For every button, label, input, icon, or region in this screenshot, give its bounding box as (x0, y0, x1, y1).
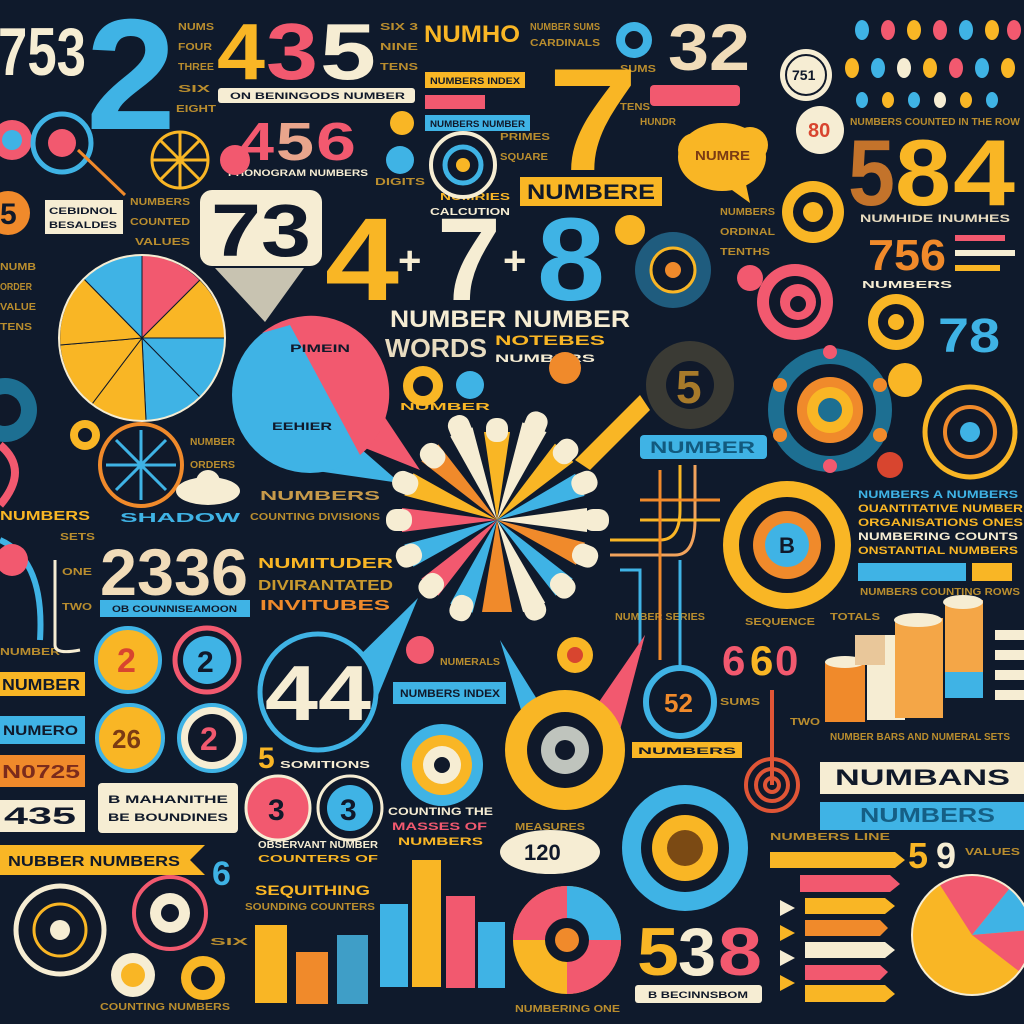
caption cream mid left (98, 783, 238, 833)
badge ornament (782, 181, 844, 243)
icon grid (845, 20, 1021, 108)
badge 80 (796, 106, 844, 154)
dense small text texture: TWO (62, 602, 92, 613)
text block right (858, 489, 1023, 557)
caption bar chart: SEQUITHING (255, 882, 370, 898)
funnel dial middle (500, 635, 645, 810)
sum 4+7+8: 7 (437, 194, 501, 326)
left stacked labels: N0725 (2, 762, 80, 782)
dense small text texture: NUMBER SERIES (615, 612, 705, 623)
caption left lines: SHADOW (120, 510, 241, 525)
caption lines low: COUNTING THE (388, 806, 493, 818)
label NUMBERE: NUMBERE (527, 181, 655, 204)
numeral 7: 7 (548, 38, 638, 201)
caption left cream (45, 200, 123, 234)
small captions: COUNTERS OF (258, 854, 378, 865)
dense small text texture: CARDINALS (530, 38, 600, 49)
dense small text texture: DIGITS (375, 177, 425, 188)
numeral 456: 6 (316, 112, 356, 172)
caption 538 (635, 985, 762, 1003)
left column ornaments (0, 120, 32, 160)
bar 2336: OB COUNNISEAMOON (112, 604, 237, 614)
left-edge figure (0, 540, 80, 652)
numeral 660: 6 (722, 637, 745, 684)
small captions: NUMRIES (440, 192, 510, 203)
text block right: ORGANISATIONS ONES (858, 517, 1023, 529)
numeral 538 (637, 914, 762, 990)
dense small text texture: SOUNDING COUNTERS (245, 902, 375, 913)
block of small labels: NUMBERS INDEX (430, 76, 520, 86)
dense small text texture: ORDINAL (720, 227, 775, 238)
numeral 584: 4 (953, 120, 1015, 225)
small captions: SOMITIONS (280, 760, 371, 771)
label NUMBANS (820, 762, 1024, 794)
dense small text texture: ORDER (0, 282, 33, 293)
bubble 120: 120 (524, 840, 561, 865)
small yellow ornament (70, 420, 100, 450)
small captions (258, 192, 510, 865)
block of small labels: NUMBERS NUMBER (430, 119, 526, 129)
eye dial bottom (134, 877, 206, 949)
label NUMBERE (520, 177, 662, 206)
large blue dial (622, 785, 748, 911)
dense small text texture: NUMBERS (130, 197, 190, 208)
caption lines low: NUMBERS (398, 836, 483, 848)
circle 44 (260, 598, 418, 750)
text block mid: DIVIRANTATED (258, 577, 393, 594)
numeral 5 small: 5 (258, 742, 275, 775)
dense small text texture: NUMBER (190, 437, 236, 448)
sum 4+7+8: 8 (537, 194, 605, 326)
left edge dial (0, 378, 37, 442)
arrow banner (0, 845, 205, 875)
caption left lines: NUMBERS (0, 508, 90, 523)
dense small text texture: NUMBERING ONE (515, 1004, 620, 1015)
label NUMBERS blue (820, 802, 1024, 830)
block of small labels (425, 72, 530, 131)
box 73 (200, 189, 322, 272)
spiral (757, 264, 833, 340)
numeral 59 (908, 835, 956, 876)
dense small text texture: NUMBER SUMS (530, 22, 600, 33)
caption cream mid left: B MAHANITHE (108, 794, 228, 806)
numeral 59: 5 (908, 835, 928, 876)
dense small text texture: NUMBERS COUNTED IN THE ROW (850, 117, 1021, 128)
dense small text texture: SUMS (620, 64, 656, 75)
dense small text texture: COUNTING DIVISIONS (250, 512, 380, 523)
numeral 2336: 2336 (100, 535, 248, 609)
ornament dark blue dial (635, 232, 711, 308)
left stacked labels: 435 (4, 803, 76, 830)
caption bar (218, 88, 415, 103)
compass (100, 424, 182, 506)
eye dial (33, 114, 125, 195)
callout pie: PIMEIN (290, 343, 350, 355)
dense small text texture: SEQUENCE (745, 617, 815, 628)
dense small text texture: NUMBERS LINE (770, 832, 891, 843)
left stacked labels (0, 672, 85, 832)
dense small text texture: SIX 3 (380, 22, 419, 33)
pie chart bottom right (912, 875, 1024, 995)
label NUMBER (640, 435, 767, 459)
dense small text texture: SETS (60, 532, 95, 543)
sum 4+7+8 (325, 194, 605, 326)
speech cloud: NUMRE (695, 148, 750, 163)
dense small text texture: ONE (62, 567, 92, 578)
sun dial B (723, 481, 851, 609)
numeral 59: 9 (936, 835, 956, 876)
dial centre low (401, 724, 483, 806)
small captions: OBSERVANT NUMBER (258, 840, 379, 851)
numeral 584 (848, 120, 1015, 225)
small notes: NUMBERS (495, 353, 595, 365)
heading NUMHO: NUMHO (424, 21, 520, 48)
bar text right (858, 563, 1012, 581)
label blue upper (393, 682, 506, 704)
sum 4+7+8: 4 (325, 194, 399, 326)
small list far right (995, 630, 1024, 700)
text block mid: INVITUBES (260, 597, 390, 614)
dense small text texture: VALUES (965, 847, 1020, 858)
caption numbers: NUMHIDE INUMHES (860, 213, 1010, 225)
dense small text texture: NINE (380, 42, 419, 53)
text block mid: NUMITUDER (258, 555, 393, 572)
label blue upper: NUMBERS INDEX (400, 688, 501, 700)
dense small text texture: TENS (620, 102, 650, 113)
small dials bottom (111, 953, 225, 1000)
sun dial B: B (779, 533, 795, 558)
caption bar: ON BENINGODS NUMBER (230, 91, 406, 101)
caption left lines (0, 488, 381, 525)
pink label bar (650, 85, 740, 106)
numeral 753: 753 (0, 14, 86, 90)
sunburst ornament (152, 132, 208, 188)
dense small text texture: NUMBER BARS AND NUMERAL SETS (830, 732, 1010, 743)
dense small text texture: TENS (380, 62, 418, 73)
caption left cream: BESALDES (49, 220, 117, 230)
numeral 5 tile: 5 (0, 198, 17, 231)
dense small text texture: COUNTED (130, 217, 190, 228)
caption left lines: NUMBERS (260, 488, 381, 503)
badge 52 (646, 668, 714, 736)
numeral 32: 32 (668, 10, 750, 84)
arrow list (770, 852, 905, 1002)
wheel centre (386, 408, 609, 625)
small notes (495, 332, 605, 365)
label NUMBANS: NUMBANS (835, 765, 1010, 790)
badge 751: 751 (792, 67, 816, 83)
dense small text texture: ORDERS (190, 460, 235, 471)
badge 52: 52 (664, 688, 693, 718)
numeral 660: 0 (775, 637, 798, 684)
numeral 756: 756 (868, 231, 946, 280)
dense small text texture: SQUARE (500, 152, 548, 163)
dense small text texture: COUNTING NUMBERS (100, 1002, 230, 1013)
sum 4+7+8: + (398, 239, 421, 283)
caption 538: B BECINNSBOM (648, 990, 748, 1000)
circles 2, 2, 26, 2: 2 (197, 646, 214, 679)
text block right: NUMBERS A NUMBERS (858, 489, 1018, 501)
small notes: NOTEBES (495, 332, 605, 348)
numeral 660: 6 (750, 637, 773, 684)
funnel under 73 (215, 268, 304, 322)
numeral 538: 8 (718, 914, 762, 990)
numbered badges 3: 3 (268, 794, 285, 827)
yellow caption bar (632, 742, 742, 758)
dense small text texture: THREE (178, 62, 214, 73)
dense small text texture: PRIMES (500, 132, 550, 143)
ornament 5 (646, 341, 734, 429)
numeral 5 tile (0, 191, 30, 235)
numeral 435 (217, 7, 376, 96)
dense small text texture: TENS (0, 322, 32, 333)
dense small text texture: NUMBERS (720, 207, 775, 218)
numeral 584: 5 (848, 120, 895, 225)
circle 44: 44 (265, 649, 371, 737)
circles 2, 2, 26, 2: 2 (117, 642, 136, 680)
left edge arc (0, 445, 15, 505)
dense small text texture: TENTHS (720, 247, 770, 258)
arrow banner: NUBBER NUMBERS (8, 853, 180, 870)
badge 751 (780, 49, 832, 101)
badge yellow face (868, 294, 924, 350)
numeral 6: 6 (212, 855, 231, 893)
dense small text texture: VALUE (0, 302, 36, 313)
numbered badges 3: 3 (340, 794, 357, 827)
caption lines low (388, 806, 493, 848)
circles 2, 2, 26, 2 (96, 628, 245, 771)
dense small text texture: NUMS (178, 22, 214, 33)
small caption 456: PHONOGRAM NUMBERS (228, 168, 368, 178)
ornament 5: 5 (676, 361, 702, 413)
connector lines (610, 465, 720, 670)
numeral 435: 3 (266, 7, 318, 96)
small captions: CALCUTION (430, 207, 510, 218)
speech cloud (678, 123, 768, 203)
label NUMBERS blue: NUMBERS (860, 805, 995, 827)
numeral 584: 8 (895, 120, 951, 225)
badge 80: 80 (808, 120, 830, 142)
dense small text texture: FOUR (178, 42, 213, 53)
text block right: NUMBERING COUNTS (858, 531, 1018, 543)
caption lines low: MASSES OF (392, 821, 487, 833)
dense small text texture: NUMERALS (440, 657, 500, 668)
dense small text texture: SIX (178, 84, 211, 95)
bar chart (255, 860, 505, 1004)
dense small text texture: HUNDR (640, 117, 677, 128)
numeral 456: 4 (240, 112, 274, 172)
numeral 435: 5 (320, 7, 376, 96)
donut bottom (513, 886, 621, 994)
text block right: ONSTANTIAL NUMBERS (858, 545, 1018, 557)
callout pie: EEHIER (272, 421, 332, 433)
numeral 456: 5 (276, 112, 314, 172)
dense small text texture: VALUES (135, 237, 190, 248)
circles 2, 2, 26, 2: 2 (200, 721, 218, 757)
target dial (16, 886, 104, 974)
callout pie (232, 316, 420, 483)
circles 2, 2, 26, 2: 26 (112, 724, 141, 754)
list lines right (955, 235, 1015, 271)
box 73: 73 (211, 189, 311, 272)
caption cream mid left: BE BOUNDINES (108, 812, 228, 824)
numeral 78: 78 (938, 310, 1000, 363)
cloud small (176, 470, 240, 505)
left stacked labels: NUMERO (3, 722, 78, 738)
text block mid (258, 555, 393, 614)
NUMBER NUMBER: NUMBER NUMBER (390, 306, 630, 333)
dense small text texture: MEASURES (515, 822, 585, 833)
numeral 435: 4 (217, 7, 266, 96)
dense small text texture: TOTALS (830, 612, 880, 623)
dense small text texture: NUMBER (0, 647, 61, 658)
dense small text texture: TWO (790, 717, 820, 728)
numeral 660 (722, 637, 798, 684)
dial right (925, 387, 1015, 477)
caption numbers 756: NUMBERS (862, 280, 953, 291)
bar 2336 (100, 600, 250, 617)
WORDS: WORDS (385, 333, 487, 363)
wheel arrow up right (575, 395, 650, 470)
numbered badges 3 (246, 776, 382, 840)
sum 4+7+8: + (503, 239, 526, 283)
dense small text texture: NUMBERS COUNTING ROWS (860, 587, 1020, 598)
label NUMBER: NUMBER (650, 438, 755, 457)
small captions: NUMBER (400, 402, 492, 413)
numeral 538: 3 (678, 914, 716, 990)
barrels (825, 595, 983, 722)
caption left cream: CEBIDNOL (49, 206, 118, 216)
dense small text texture: NUMB (0, 262, 36, 273)
dense small text texture: SIX (210, 937, 249, 948)
mandala right (768, 345, 892, 473)
numeral 456 (240, 112, 356, 172)
bubble 120 (500, 830, 600, 874)
dense small text texture: SUMS (720, 697, 760, 708)
pie chart left (59, 255, 225, 421)
left stacked labels: NUMBER (2, 677, 80, 694)
numeral 538: 5 (637, 914, 679, 990)
yellow caption bar: NUMBERS (638, 746, 736, 756)
dense small text texture: EIGHT (176, 104, 216, 115)
spiral red (746, 690, 798, 811)
text block right: OUANTITATIVE NUMBER (858, 503, 1023, 515)
small ornaments (220, 22, 922, 673)
